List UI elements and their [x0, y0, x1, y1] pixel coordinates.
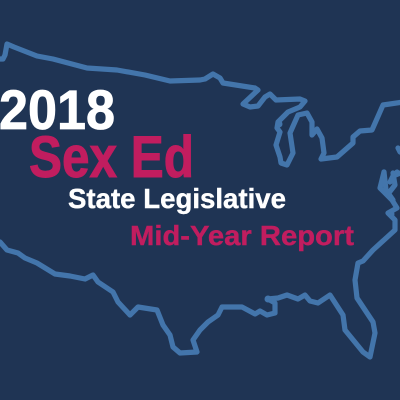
map detail: Lake Michigan blob — [276, 120, 282, 128]
map detail: Chesapeake blob — [388, 210, 394, 218]
subtitle: Mid-Year Report: Mid-Year Report — [130, 220, 354, 251]
map detail: Mississippi delta blob — [264, 296, 272, 302]
title: Sex Ed: Sex Ed — [29, 125, 194, 190]
US map outline — [0, 44, 400, 357]
title: 2018: 2018 — [0, 78, 115, 141]
subtitle: State Legislative: State Legislative — [68, 183, 286, 214]
